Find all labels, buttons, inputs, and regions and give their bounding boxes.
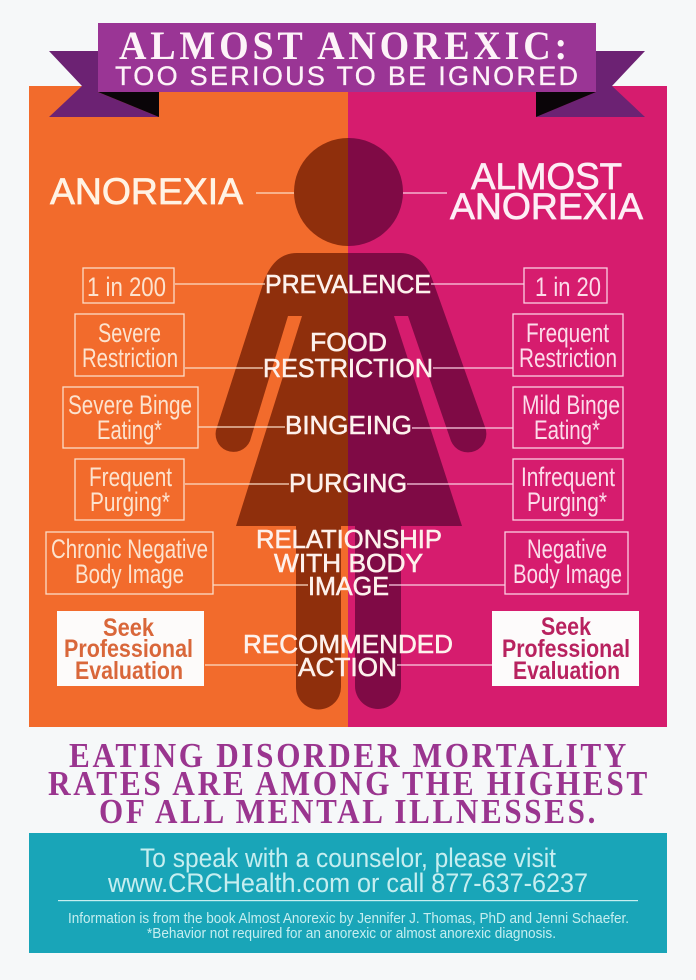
- box: mild binge eating: [513, 387, 623, 448]
- heading: almost anorexia: ALMOST: [471, 156, 622, 197]
- box: frequent restriction: [513, 314, 623, 376]
- box: frequent restriction: Restriction: [519, 343, 617, 373]
- box: mild binge eating: Mild Binge: [522, 390, 620, 420]
- box: chronic negative body image: Chronic Negative: [51, 534, 208, 564]
- label: food restriction: FOOD: [310, 327, 387, 357]
- label: recommended action: ACTION: [298, 652, 397, 682]
- ribbon fold: left: [98, 92, 159, 117]
- box: 1 in 20: 1 in 20: [535, 272, 601, 302]
- box: seek professional evaluation: Professional: [64, 635, 193, 663]
- contact text: To speak with a counselor, please visit: [140, 843, 556, 873]
- box: seek professional evaluation: [492, 611, 639, 686]
- panel: contact footer: [29, 833, 667, 953]
- box: infrequent purging: [513, 459, 623, 520]
- box: mild binge eating: Eating*: [534, 415, 600, 445]
- title: ALMOST ANOREXIC:: [119, 23, 571, 68]
- box: severe binge eating: [63, 387, 198, 448]
- box: seek professional evaluation: Evaluation: [513, 657, 620, 685]
- connector lines: [175, 193, 524, 665]
- box: seek professional evaluation: Seek: [541, 613, 591, 641]
- ribbon banner: [49, 23, 645, 117]
- label: bingeing: BINGEING: [285, 410, 412, 440]
- right column boxes: [492, 268, 639, 686]
- title: [115, 23, 578, 91]
- ribbon tail: right: [536, 51, 645, 117]
- contact text: www.CRCHealth.com or call 877-637-6237: [107, 868, 588, 898]
- box: chronic negative body image: Body Image: [75, 559, 184, 589]
- left column boxes: [46, 268, 213, 686]
- source note: *Behavior not required for an anorexic or almost anorexic diagnosis.: [147, 925, 556, 942]
- contact text: [107, 843, 588, 898]
- figure: left half: [216, 138, 348, 710]
- ribbon face: [98, 23, 596, 92]
- box: severe binge eating: Severe Binge: [68, 390, 192, 420]
- ribbon tail: left: [49, 51, 159, 117]
- box: frequent purging: Purging*: [90, 487, 170, 517]
- label: food restriction: RESTRICTION: [263, 353, 433, 383]
- box: 1 in 20: [524, 268, 607, 303]
- box: negative body image: Negative: [527, 534, 607, 564]
- mortality statement: [48, 736, 650, 831]
- label: recommended action: [243, 629, 453, 682]
- box: seek professional evaluation: [57, 611, 204, 686]
- box: 1 in 200: 1 in 200: [87, 272, 166, 302]
- box: frequent purging: Frequent: [89, 462, 172, 492]
- box: severe restriction: [75, 314, 184, 376]
- source note: Information is from the book Almost Anorexic by Jennifer J. Thomas, PhD and Jenni Schaefer.: [68, 910, 629, 927]
- box: seek professional evaluation: Evaluation: [75, 657, 183, 685]
- label: recommended action: RECOMMENDED: [243, 629, 453, 659]
- mortality statement: OF ALL MENTAL ILLNESSES.: [99, 792, 598, 831]
- box: seek professional evaluation: Professional: [502, 635, 630, 663]
- box: severe restriction: Severe: [98, 318, 161, 348]
- row labels: [243, 269, 453, 682]
- label: prevalence: PREVALENCE: [265, 269, 431, 299]
- label: relationship with body image: WITH BODY: [274, 548, 423, 578]
- title: TOO SERIOUS TO BE IGNORED: [115, 61, 578, 91]
- label: relationship with body image: IMAGE: [308, 571, 389, 601]
- box: severe restriction: Restriction: [82, 343, 178, 373]
- box: chronic negative body image: [46, 532, 213, 594]
- ribbon fold: right: [536, 92, 596, 117]
- label: relationship with body image: [256, 524, 442, 601]
- box: seek professional evaluation: Seek: [103, 614, 154, 642]
- panel: almost anorexia side: [348, 86, 667, 727]
- box: infrequent purging: Purging*: [527, 487, 607, 517]
- box: severe binge eating: Eating*: [97, 415, 162, 445]
- box: frequent purging: [75, 459, 184, 520]
- label: relationship with body image: RELATIONSHIP: [256, 524, 442, 554]
- heading: almost anorexia: [450, 156, 643, 227]
- label: purging: PURGING: [289, 468, 407, 498]
- box: infrequent purging: Infrequent: [521, 462, 615, 492]
- source note: [68, 910, 629, 942]
- heading: anorexia: ANOREXIA: [50, 171, 243, 212]
- label: food restriction: [263, 327, 433, 383]
- box: frequent restriction: Frequent: [526, 318, 609, 348]
- box: negative body image: [505, 532, 628, 594]
- figure: right half: [348, 138, 486, 709]
- panel: anorexia side: [29, 86, 348, 727]
- figure: woman silhouette: [216, 138, 486, 710]
- heading: almost anorexia: ANOREXIA: [450, 186, 643, 227]
- mortality statement: EATING DISORDER MORTALITY: [69, 736, 629, 775]
- box: negative body image: Body Image: [513, 559, 622, 589]
